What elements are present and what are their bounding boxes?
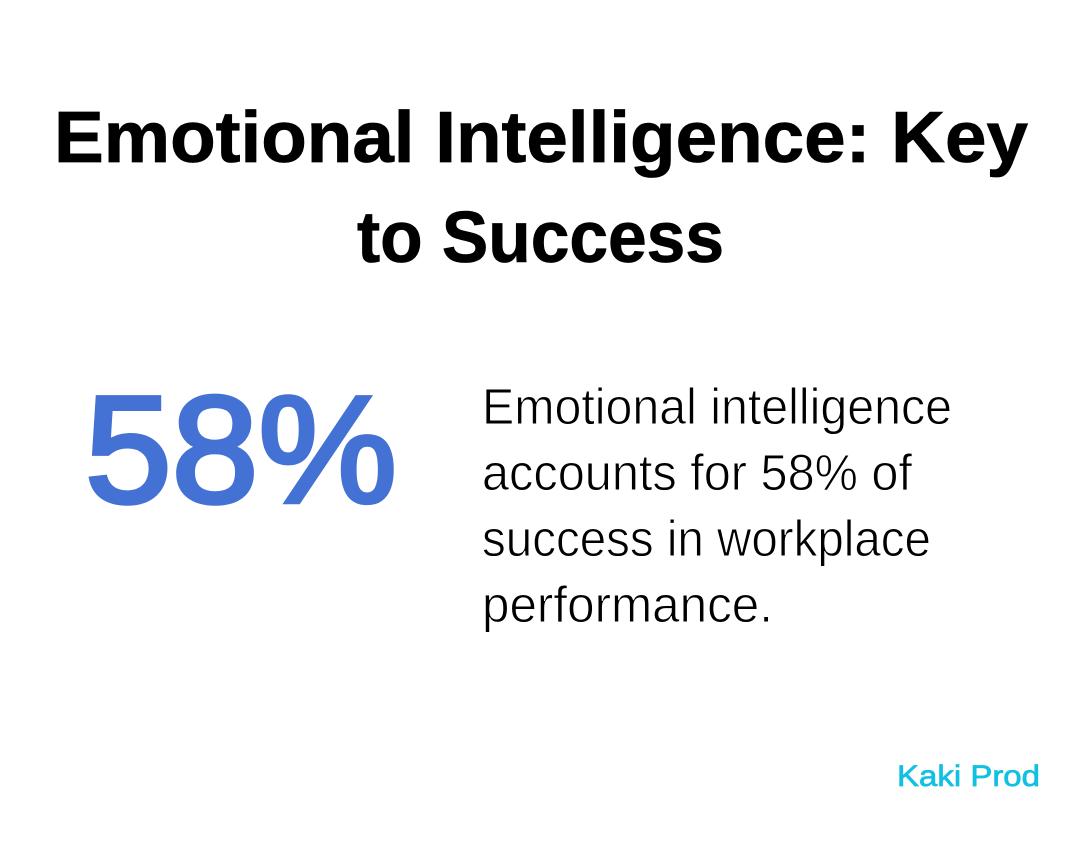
title <box>54 98 1028 278</box>
description text: accounts for 58% of <box>482 444 913 501</box>
description text: success in workplace <box>482 510 931 567</box>
title: to Success <box>357 198 724 278</box>
description text: Emotional intelligence <box>482 378 952 435</box>
description text: performance. <box>482 576 773 633</box>
description text <box>482 378 952 633</box>
logo: Kaki Prod: Kaki Prod <box>897 760 1040 793</box>
big statistic: 58%: 58% <box>85 365 397 535</box>
title: Emotional Intelligence: Key <box>54 98 1028 178</box>
